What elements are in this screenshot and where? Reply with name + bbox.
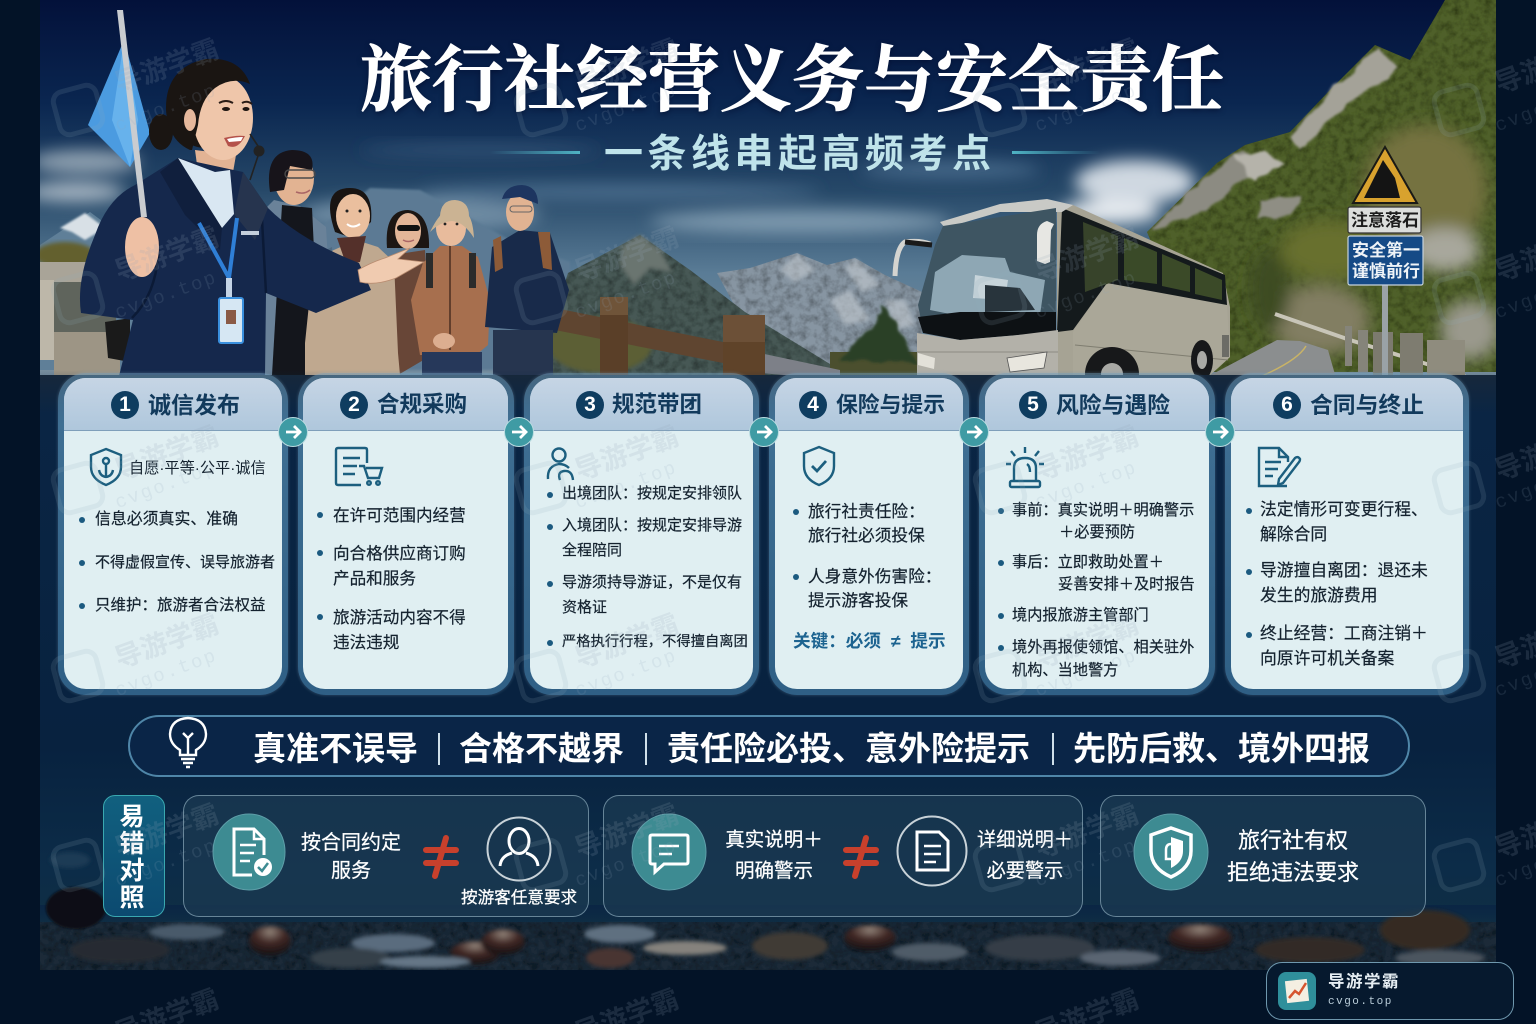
road sign: 安全第一 [1352, 240, 1420, 260]
label: easy to confuse: 对 [119, 857, 144, 885]
label: easy to confuse [103, 795, 165, 917]
icon: tourist circle [486, 816, 552, 882]
road sign: 注意落石 [1351, 210, 1419, 230]
text: agency right: 拒绝违法要求 [1227, 860, 1359, 885]
man 2 [265, 200, 327, 375]
icon: document and cart [334, 446, 384, 486]
not equal sign [843, 835, 879, 879]
icon: guide person [546, 447, 574, 480]
title: 旅行社经营义务与安全责任 [360, 41, 1224, 121]
brand badge [1266, 962, 1514, 1020]
icon: speech bubble circle [632, 814, 706, 890]
icon: shield circle [1134, 814, 1208, 890]
not equal sign [423, 835, 459, 879]
number badge 2: 2 [348, 392, 360, 416]
list item: 向合格供应商订购 [333, 544, 466, 562]
list item [793, 565, 942, 614]
number badge 1: 1 [119, 392, 131, 416]
watermark pattern: cvgo.top [572, 80, 680, 137]
list item: ＋必要预防 [1059, 524, 1135, 540]
panel: card 3 group leading [524, 373, 759, 695]
list item: 出境团队：按规定安排领队 [562, 485, 742, 502]
watermark pattern: cvgo.top [112, 835, 220, 892]
list item: 资格证 [562, 599, 607, 616]
list item: 导游擅自离团：退还未 [1260, 561, 1428, 580]
key takeaway: 关键：必须 ≠ 提示 [793, 631, 946, 651]
text: follow contract [301, 832, 401, 882]
watermark pattern: 导游学霸 [111, 799, 223, 864]
number badge 5: 5 [1027, 392, 1039, 416]
tour guide [80, 10, 424, 376]
list item [547, 571, 742, 620]
list item: 解除合同 [1260, 525, 1327, 544]
panel: explanation comparison [603, 795, 1083, 917]
heading: card 4: 保险与提示 [836, 392, 945, 417]
list item [317, 540, 466, 590]
watermark pattern: cvgo.top [572, 645, 680, 702]
arrow: card 5 to card 6 [1205, 417, 1235, 447]
list item [1246, 622, 1428, 671]
list item [1246, 559, 1428, 608]
subtitle with side rules: 一条线串起高频考点 [604, 133, 996, 176]
number badge 6 [1273, 390, 1301, 418]
icon: brand logo [1278, 972, 1316, 1010]
watermark pattern: cvgo.top [112, 457, 220, 514]
road sign: 谨慎前行 [1352, 262, 1420, 281]
text: truthful explanation: 明确警示 [735, 860, 813, 882]
text: detailed explanation: 必要警示 [987, 861, 1063, 882]
far mountains [40, 212, 132, 370]
icon: light bulb [168, 716, 208, 768]
right mountain [1147, 0, 1496, 372]
watermark pattern: 导游学霸 [1031, 799, 1143, 864]
watermark pattern: 导游学霸 [1031, 222, 1143, 287]
number badge 4 [799, 390, 827, 418]
watermark pattern: 导游学霸 [111, 34, 223, 99]
list item: 入境团队：按规定安排导游 [562, 517, 742, 534]
list item [998, 636, 1194, 682]
watermark pattern: cvgo.top [572, 835, 680, 892]
panel: card 1 honest publishing [58, 373, 288, 695]
list item [793, 500, 925, 549]
panel: right to refuse [1100, 795, 1426, 917]
watermark pattern: 导游学霸 [571, 609, 683, 674]
label: easy to confuse: 错 [119, 830, 144, 858]
list item: 信息必须真实、准确 [95, 510, 238, 528]
road sign [1348, 147, 1423, 375]
watermark pattern: 导游学霸 [571, 222, 683, 287]
number badge 3: 3 [584, 392, 596, 416]
heading: card 6: 合同与终止 [1310, 392, 1424, 418]
woman 4 [387, 210, 429, 248]
number badge 1 [111, 390, 139, 418]
tree [837, 305, 917, 362]
icon: contract and pen [1258, 446, 1302, 488]
list item: 人身意外伤害险： [808, 567, 942, 586]
principle line: 自愿·平等·公平·诚信 [129, 460, 266, 477]
man 6 with cap [485, 230, 569, 333]
watermark pattern: 导游学霸 [571, 34, 683, 99]
watermark pattern: cvgo.top [112, 267, 220, 324]
panel: card 6 contract and termination [1225, 373, 1469, 695]
panel: card 5 risk and emergencies [979, 373, 1215, 695]
list item: 妥善安排＋及时报告 [1058, 576, 1195, 592]
text: detailed explanation [977, 829, 1073, 882]
arrow: card 2 to card 3 [504, 417, 534, 447]
text: truthful explanation [725, 829, 823, 882]
list item: 导游须持导游证，不是仅有 [562, 574, 742, 591]
number badge 4: 4 [807, 392, 819, 416]
watermark pattern: 导游学霸 [1031, 609, 1143, 674]
lower backdrop [40, 375, 1496, 397]
watermark pattern: cvgo.top [572, 267, 680, 324]
number badge 6: 6 [1281, 392, 1293, 416]
tour group [262, 150, 569, 376]
watermark pattern: 导游学霸 [111, 222, 223, 287]
icon: alarm light [1006, 447, 1044, 488]
panel: card 2 compliant procurement [298, 373, 514, 695]
watermark pattern: cvgo.top [1032, 267, 1140, 324]
text: tourist demands: 按游客任意要求 [461, 888, 577, 907]
woman 5 with hat [411, 246, 490, 355]
text: truthful explanation: 真实说明＋ [725, 829, 823, 851]
list item: 全程陪同 [562, 542, 622, 559]
left stone wall [40, 262, 86, 282]
icon: shield with anchor [90, 448, 122, 486]
text: agency right: 旅行社有权 [1238, 828, 1348, 853]
list item: 向原许可机关备案 [1260, 649, 1394, 668]
watermark pattern: 导游学霸 [111, 421, 223, 486]
watermark pattern: cvgo.top [1032, 835, 1140, 892]
slogan segment: 合格不越界 [459, 730, 624, 767]
watermark pattern: 导游学霸 [1031, 421, 1143, 486]
arrow: card 4 to card 5 [959, 417, 989, 447]
list item [547, 514, 742, 563]
list item: 产品和服务 [333, 568, 416, 588]
heading: card 3: 规范带团 [612, 392, 702, 417]
slogan segment: 真准不误导 [253, 730, 418, 767]
list item: 事后：立即救助处置＋ [1012, 554, 1164, 570]
arrow: card 3 to card 4 [749, 417, 779, 447]
woman 3 [305, 240, 400, 375]
arrow: card 1 to card 2 [278, 417, 308, 447]
icon: document circle [896, 816, 968, 886]
list item: 事前：真实说明＋明确警示 [1012, 502, 1194, 518]
list item [1246, 498, 1428, 547]
number badge 3 [576, 390, 604, 418]
list item: 提示游客投保 [808, 591, 908, 610]
list item: 违法违规 [333, 632, 399, 652]
fence [555, 308, 723, 363]
text: detailed explanation: 详细说明＋ [977, 830, 1073, 851]
list item [317, 604, 466, 654]
watermark pattern: cvgo.top [112, 645, 220, 702]
text: agency right [1227, 828, 1359, 885]
watermark pattern: 导游学霸 [571, 799, 683, 864]
panel: contract service comparison [183, 795, 589, 917]
list item: 在许可范围内经营 [333, 506, 466, 524]
watermark pattern: cvgo.top [1032, 457, 1140, 514]
margins around the photo [0, 0, 40, 1024]
panel: card 4 insurance [769, 373, 969, 695]
list item: 严格执行行程，不得擅自离团 [562, 634, 748, 650]
list item: 只维护：旅游者合法权益 [95, 596, 266, 614]
number badge 5 [1019, 390, 1047, 418]
heading: card 2: 合规采购 [377, 392, 467, 417]
list item: 终止经营：工商注销＋ [1260, 624, 1428, 643]
bus [892, 199, 1230, 375]
list item [998, 500, 1194, 544]
watermark pattern: 导游学霸 [1031, 34, 1143, 99]
list item: 旅游活动内容不得 [333, 608, 466, 626]
watermark pattern: cvgo.top [1032, 80, 1140, 137]
watermark pattern: cvgo.top [1032, 645, 1140, 702]
list item: 机构、当地警方 [1012, 662, 1118, 679]
slogan segment: 先防后救、境外四报 [1073, 730, 1370, 767]
list item: 不得虚假宣传、误导旅游者 [95, 554, 275, 570]
list item: 境外再报使领馆、相关驻外 [1012, 639, 1194, 656]
label: easy to confuse: 易 [119, 803, 144, 831]
list item: 境内报旅游主管部门 [1012, 606, 1149, 624]
watermark pattern: cvgo.top [572, 457, 680, 514]
list item: 法定情形可变更行程、 [1260, 500, 1428, 519]
watermark pattern: 导游学霸 [571, 421, 683, 486]
list item [998, 552, 1195, 596]
list item: 旅行社责任险： [808, 502, 925, 521]
heading: card 1: 诚信发布 [148, 392, 240, 418]
watermark pattern: cvgo.top [112, 80, 220, 137]
summary slogan bar [128, 715, 1410, 777]
text: follow contract: 按合同约定 [301, 832, 401, 854]
slogan segment: 责任险必投、意外险提示 [667, 730, 1030, 767]
watermark pattern: 导游学霸 [111, 609, 223, 674]
list item: 旅行社必须投保 [808, 526, 925, 545]
text: follow contract: 服务 [331, 860, 371, 882]
icon: contract document circle [212, 814, 286, 890]
heading: card 5: 风险与遇险 [1056, 392, 1170, 418]
list item: 发生的旅游费用 [1260, 586, 1377, 605]
icon: shield check [802, 446, 836, 486]
subtitle with side rules [496, 133, 1094, 176]
road and guardrail [1211, 340, 1334, 375]
river rocks [40, 922, 1496, 970]
brand name: 导游学霸 [1328, 973, 1400, 991]
brand url: cvgo.top [1328, 996, 1393, 1008]
label: easy to confuse: 照 [119, 884, 144, 912]
number badge 2 [340, 390, 368, 418]
